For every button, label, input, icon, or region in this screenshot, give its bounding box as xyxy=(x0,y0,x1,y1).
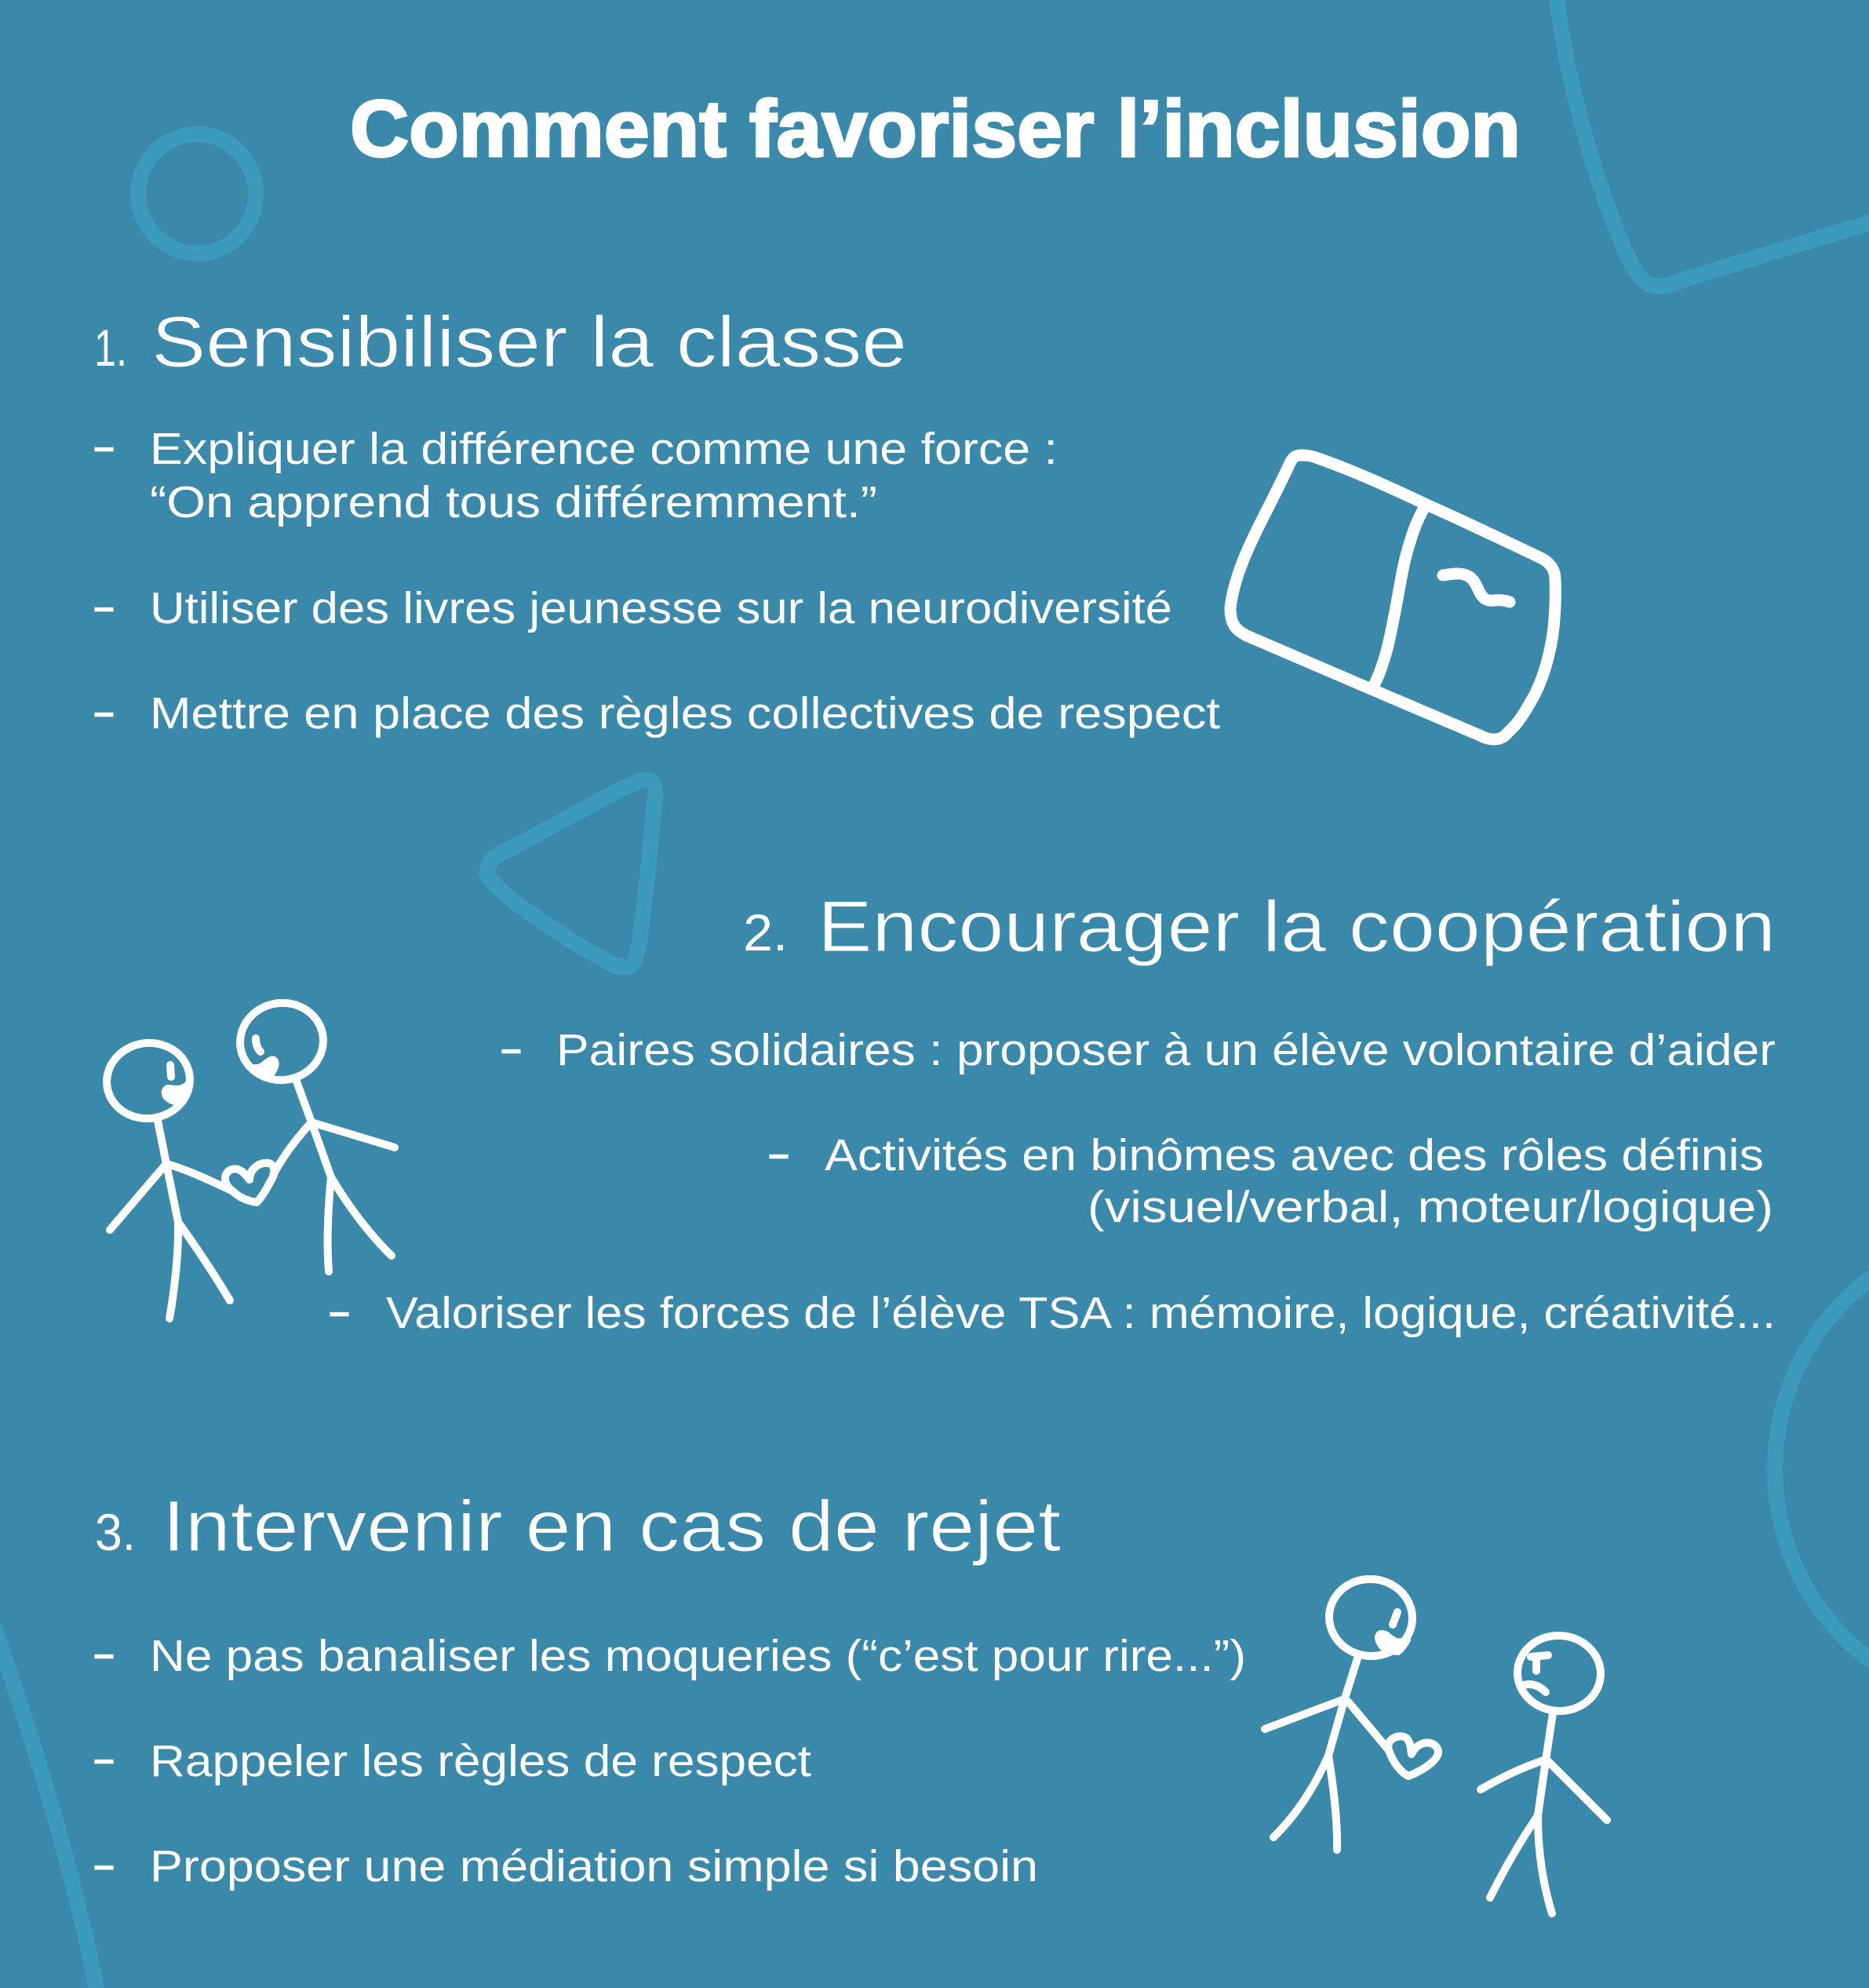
heart xyxy=(1388,1736,1438,1776)
sad figure xyxy=(1481,1632,1607,1913)
bullet: paires solidaires: – xyxy=(502,1023,520,1073)
icon: eraser xyxy=(1230,455,1555,739)
bullet: rappeler les règles: Rappeler les règles de respect xyxy=(150,1736,811,1786)
decorative shape: right-side circle xyxy=(1775,1231,1869,1708)
bullet: expliquer la différence: – xyxy=(95,421,113,471)
section 1 heading: 1. xyxy=(94,319,127,377)
bullet: paires solidaires: Paires solidaires : proposer à un élève volontaire d’aider xyxy=(556,1025,1776,1075)
section 3 heading: 3. xyxy=(95,1503,136,1561)
section 3 heading: Intervenir en cas de rejet xyxy=(162,1486,1061,1567)
bullet: rappeler les règles: – xyxy=(95,1733,113,1783)
bullet: médiation simple: – xyxy=(95,1839,113,1889)
bullet: activités en binômes xyxy=(770,1128,1773,1232)
bullet: valoriser les forces: – xyxy=(330,1286,348,1336)
title: Comment favoriser l’inclusion xyxy=(350,84,1521,173)
section 2: Encourager la coopération xyxy=(330,887,1776,1338)
bullet: ne pas banaliser: – xyxy=(95,1628,113,1678)
section 1 heading: Sensibiliser la classe xyxy=(151,302,907,382)
section 2 heading: Encourager la coopération xyxy=(818,887,1776,967)
bullet: expliquer la différence: Expliquer la différence comme une force : xyxy=(150,424,1058,474)
bullet: livres jeunesse: – xyxy=(95,581,113,631)
bullet: livres jeunesse: Utiliser des livres jeunesse sur la neurodiversité xyxy=(150,583,1172,633)
decorative shape: triangle xyxy=(486,780,655,967)
bullet: expliquer la différence xyxy=(95,421,1058,527)
illustration: two stick figures sharing a heart xyxy=(102,998,395,1319)
right figure xyxy=(235,998,395,1271)
bullet: ne pas banaliser: Ne pas banaliser les moqueries (“c’est pour rire...”) xyxy=(150,1631,1246,1681)
bullet: activités en binômes: (visuel/verbal, moteur/logique) xyxy=(1088,1182,1773,1232)
section 2 heading: 2. xyxy=(743,903,788,961)
left figure xyxy=(102,1038,233,1319)
bullet: règles collectives: Mettre en place des règles collectives de respect xyxy=(150,688,1220,739)
decorative shape: top-left circle xyxy=(138,134,256,254)
illustration: figure offering a heart to a sad figure xyxy=(1265,1575,1607,1913)
bullet: activités en binômes: – xyxy=(770,1128,788,1178)
bullet: règles collectives: – xyxy=(95,686,113,736)
section 3: Intervenir en cas de rejet xyxy=(95,1486,1246,1891)
bullet: médiation simple: Proposer une médiation simple si besoin xyxy=(150,1841,1038,1891)
section 1: Sensibiliser la classe xyxy=(94,302,1220,739)
bullet: activités en binômes: Activités en binômes avec des rôles définis xyxy=(825,1130,1764,1180)
bullet: valoriser les forces: Valoriser les forces de l’élève TSA : mémoire, logique, créativité... xyxy=(386,1288,1776,1338)
bullet: expliquer la différence: “On apprend tous différemment.” xyxy=(150,477,877,527)
decorative shape: top-right rounded corner xyxy=(1556,0,1869,286)
heart xyxy=(225,1163,274,1202)
decorative shape: bottom-left curve xyxy=(0,1626,98,1988)
figure offering heart xyxy=(1265,1575,1416,1850)
